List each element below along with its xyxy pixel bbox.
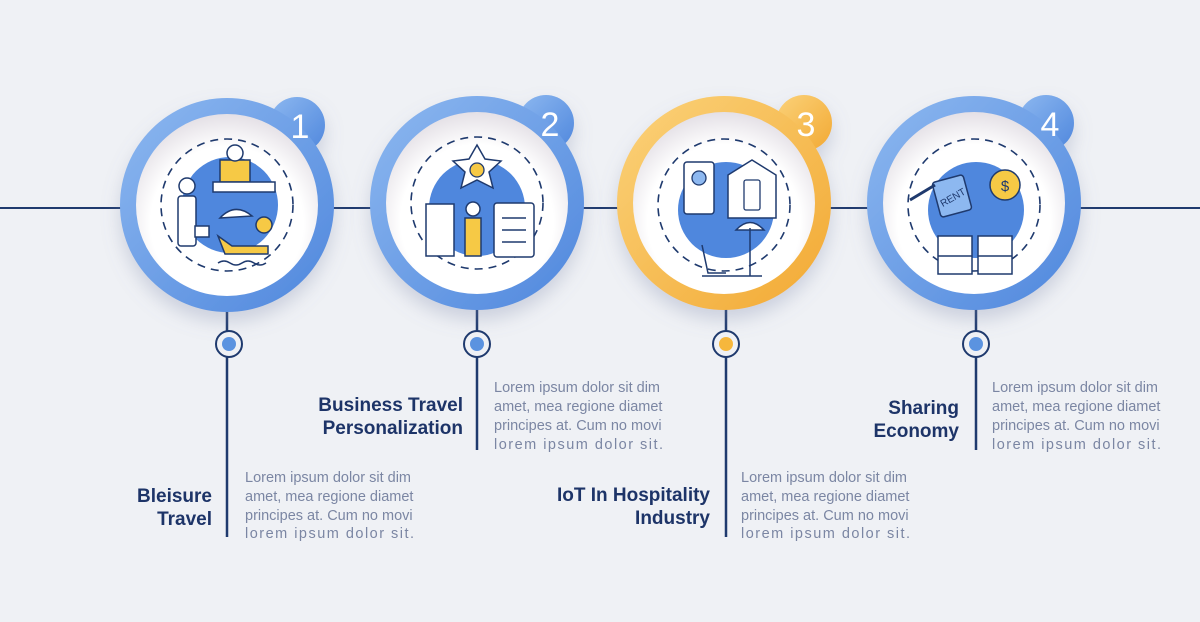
circle 3 xyxy=(617,95,832,310)
title 2: Business Travel xyxy=(318,395,463,416)
body 3: lorem ipsum dolor sit. xyxy=(741,526,910,542)
body 4: principes at. Cum no movi xyxy=(992,418,1160,434)
step 3: IoT In Hospitality Industry: 3 xyxy=(797,106,815,144)
body 3: Lorem ipsum dolor sit dim xyxy=(741,470,907,486)
step 2: Business Travel Personalization: 2 xyxy=(541,106,559,144)
circle 4 xyxy=(867,95,1081,310)
icon: IoT xyxy=(658,139,790,276)
body 3: principes at. Cum no movi xyxy=(741,508,909,524)
step 1: Bleisure Travel: 1 xyxy=(291,108,309,146)
title 2 xyxy=(318,395,463,439)
step 3: IoT In Hospitality Industry xyxy=(557,95,910,542)
step 2: Business Travel Personalization xyxy=(318,95,663,453)
body 2: Lorem ipsum dolor sit dim xyxy=(494,380,660,396)
step 4: Sharing Economy xyxy=(867,95,1161,453)
icon: sharing economy: RENT xyxy=(939,187,968,210)
node 4 xyxy=(963,331,989,357)
timeline line xyxy=(0,207,1200,209)
body 2: lorem ipsum dolor sit. xyxy=(494,437,663,453)
body 1: amet, mea regione diamet xyxy=(245,489,413,505)
title 4 xyxy=(873,398,959,442)
icon: bleisure xyxy=(161,139,293,271)
body 3: amet, mea regione diamet xyxy=(741,489,909,505)
body 3 xyxy=(741,470,910,542)
step 4: Sharing Economy: 4 xyxy=(1041,106,1059,144)
icon: personalization xyxy=(411,137,543,269)
node 3 xyxy=(713,331,739,357)
body 2 xyxy=(494,380,663,453)
body 1: Lorem ipsum dolor sit dim xyxy=(245,470,411,486)
body 1: principes at. Cum no movi xyxy=(245,508,413,524)
title 2: Personalization xyxy=(323,418,463,439)
step 1: Bleisure Travel xyxy=(120,97,414,542)
title 3 xyxy=(557,485,710,529)
circle 1 xyxy=(120,97,334,312)
body 4: lorem ipsum dolor sit. xyxy=(992,437,1161,453)
body 2: amet, mea regione diamet xyxy=(494,399,662,415)
title 4: Economy xyxy=(873,421,959,442)
body 1: lorem ipsum dolor sit. xyxy=(245,526,414,542)
title 4: Sharing xyxy=(888,398,959,419)
node 2 xyxy=(464,331,490,357)
body 2: principes at. Cum no movi xyxy=(494,418,662,434)
icon: sharing economy xyxy=(908,139,1040,274)
title 3: Industry xyxy=(635,508,710,529)
body 4: Lorem ipsum dolor sit dim xyxy=(992,380,1158,396)
body 4: amet, mea regione diamet xyxy=(992,399,1160,415)
icon: sharing economy: $ xyxy=(1001,178,1010,195)
body 4 xyxy=(992,380,1161,453)
title 3: IoT In Hospitality xyxy=(557,485,710,506)
title 1 xyxy=(137,486,212,530)
circle 2 xyxy=(370,95,584,310)
title 1: Bleisure xyxy=(137,486,212,507)
title 1: Travel xyxy=(157,509,212,530)
node 1 xyxy=(216,331,242,357)
body 1 xyxy=(245,470,414,542)
